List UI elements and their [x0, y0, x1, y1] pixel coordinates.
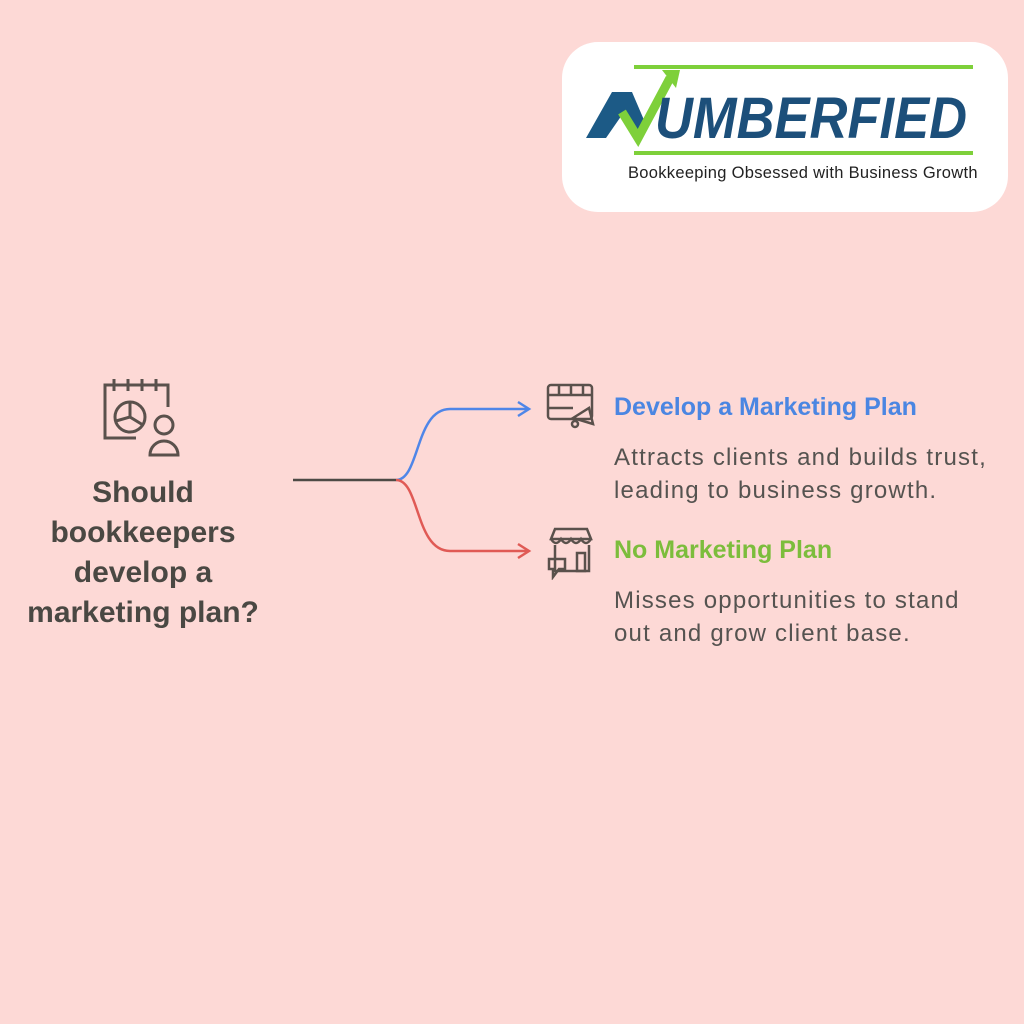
text: no plan description: Misses opportunities to stand [614, 587, 960, 614]
text: develop description: Attracts clients and builds trust, [614, 444, 987, 471]
logo mark: UMBERFIED [655, 86, 967, 151]
text: develop description: leading to business growth. [614, 477, 937, 504]
tagline: Bookkeeping Obsessed with Business Growth [628, 164, 978, 182]
logo mark [586, 65, 973, 155]
question text: Should bookkeepers develop a marketing plan? [27, 476, 259, 629]
text: develop description [614, 444, 987, 504]
heading: no plan: No Marketing Plan [614, 536, 832, 564]
icon: marketing billboard [546, 384, 595, 428]
heading: develop: Develop a Marketing Plan [614, 393, 917, 421]
logo panel [562, 42, 1008, 212]
text: no plan description: out and grow client base. [614, 620, 911, 647]
icon: store [548, 528, 593, 580]
text: no plan description [614, 587, 960, 647]
icon: calendar chart person [104, 379, 180, 456]
